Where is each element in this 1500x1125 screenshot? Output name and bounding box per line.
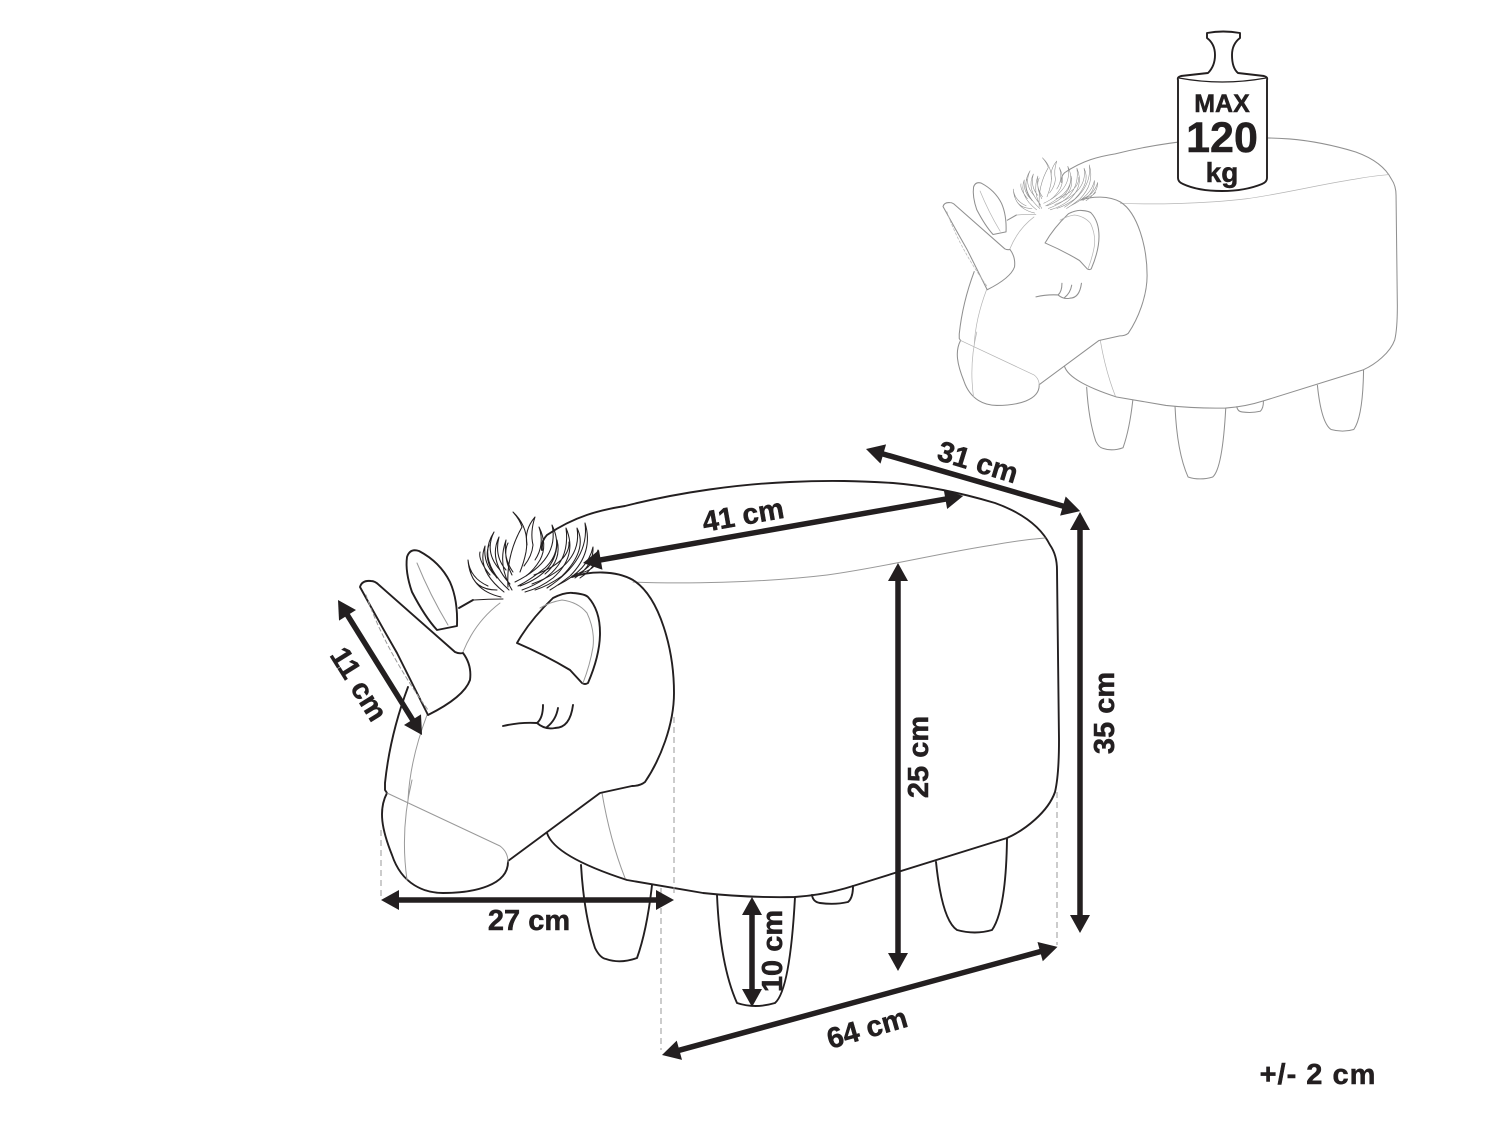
eye and lashes [503,705,573,728]
label: 11 cm: 11 cm [323,642,393,727]
face left edge [385,687,408,793]
legs [581,865,652,961]
icon: maximum load weight: kg [1206,157,1238,188]
arrow: 27 cm [381,890,674,910]
rear ear-like horn [407,550,457,630]
head outline [508,572,674,861]
arrow: 10 cm [742,897,762,1007]
label: 25 cm: 25 cm [903,716,935,798]
label: 64 cm: 64 cm [823,1002,911,1056]
icon: maximum load weight [1178,32,1267,191]
connector [459,600,473,608]
rhino stool line drawing [360,481,1059,1006]
icon: maximum load weight: MAX [1194,90,1250,118]
horn [360,581,470,715]
ear [517,593,600,684]
arrow: 31 cm [863,439,1083,521]
mane [468,512,598,600]
arrow: 11 cm [330,595,431,740]
label: 35 cm: 35 cm [1089,672,1121,754]
dashed guide lines [381,717,1057,1050]
horn stitching [366,595,428,710]
label: 27 cm: 27 cm [488,905,570,937]
arrow: 64 cm [659,937,1060,1065]
arrow: 35 cm [1070,512,1090,933]
seat seam [633,538,1045,583]
belly seam [602,793,625,878]
muzzle seams [387,603,508,880]
arrow: 25 cm [888,563,908,971]
icon: maximum load weight: 120 [1186,114,1258,162]
label: 41 cm: 41 cm [700,493,786,539]
muzzle [382,793,508,893]
tolerance note: +/- 2 cm [1260,1059,1376,1091]
small gray rhino stool illustration [943,138,1397,479]
back and body outline [542,481,1059,897]
label: 31 cm: 31 cm [934,436,1022,490]
arrow: 41 cm [581,486,965,573]
label: 10 cm: 10 cm [757,910,789,992]
